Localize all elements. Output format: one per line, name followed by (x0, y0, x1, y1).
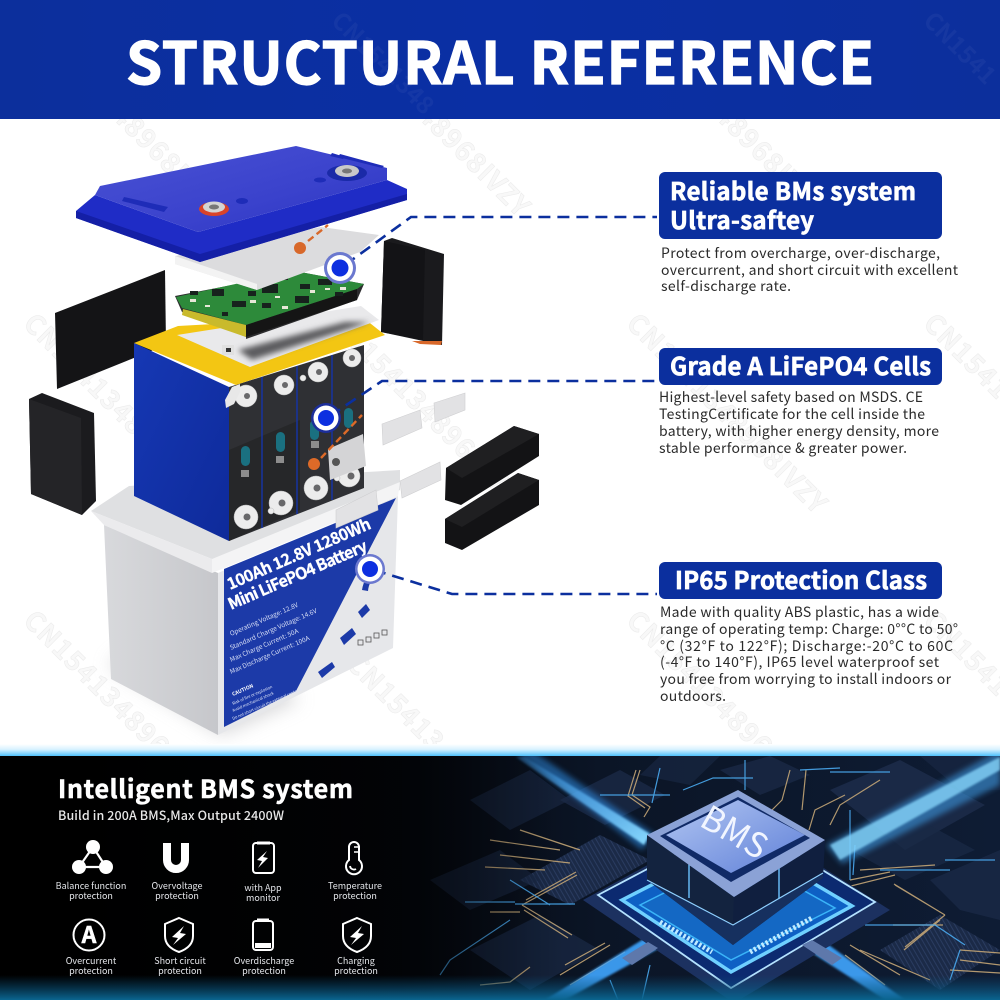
icon: balance nodes (72, 840, 113, 874)
feature: charging (334, 918, 378, 977)
black foam blocks: front right (445, 426, 539, 550)
text: BMS (661, 243, 959, 296)
chip body (647, 835, 825, 945)
chip lid (647, 790, 825, 897)
circuit blocks (430, 756, 1000, 990)
callout: BMS (659, 172, 942, 239)
callout heading: Reliable BMs system (670, 172, 916, 207)
feature: overcurrent: protection (69, 964, 113, 977)
black foam pad: rear left (55, 270, 166, 389)
chip label: BMS (693, 791, 778, 869)
gold circuit traces (480, 770, 1000, 985)
feature: overcurrent (66, 916, 117, 977)
floor shadow (108, 610, 300, 735)
case label: Standard Charge Voltage: 14.6V (228, 605, 318, 652)
watermarks: CN1541348968IVZY (322, 6, 541, 225)
cell blue side (134, 343, 229, 541)
feature: short circuit: Short circuit (154, 954, 206, 967)
feature: overdischarge: protection (242, 964, 286, 977)
terminal clip (225, 384, 240, 408)
watermarks: CN1541348968IVZY (16, 6, 235, 225)
watermarks: CN1541348968IVZY (16, 303, 235, 522)
case label: Mini LiFePO4 Battery (223, 533, 371, 615)
callout heading (670, 172, 916, 236)
title: STRUCTURAL REFERENCE (126, 17, 874, 101)
metal connector strips (336, 393, 465, 528)
feature: temperature (328, 842, 382, 902)
feature: balance (56, 840, 126, 902)
callout heading: IP65 Protection Class (675, 561, 927, 596)
chip base plate (583, 853, 890, 996)
text: case: °C (32°F to 122°F); Discharge:-20°C to 60C (660, 636, 953, 656)
feature: short circuit: protection (158, 964, 202, 977)
icon: battery bolt (253, 843, 274, 873)
leader line: cells (330, 381, 657, 416)
case left face (104, 525, 218, 735)
text: case: outdoors. (660, 686, 726, 706)
BMS panel background (0, 750, 1000, 1000)
BMS chip (583, 790, 890, 1000)
text: case: Made with quality ABS plastic, has a wide (660, 602, 939, 622)
battery case (91, 470, 400, 735)
icon: U (167, 843, 185, 869)
watermarks: CN1541348968IVZY (322, 303, 541, 522)
exploded battery illustration (29, 146, 539, 735)
case right face (218, 496, 398, 735)
text: BMS: overcurrent, and short circuit with excellent (661, 260, 959, 280)
feature: charging: protection (334, 964, 378, 977)
icon: thermometer (346, 842, 362, 874)
blue lid (76, 146, 407, 262)
feature: charging: Charging (337, 954, 375, 967)
chip base arms (622, 942, 658, 965)
top insulator sheet (177, 306, 379, 367)
text: BMS: Protect from overcharge, over-discharge, (661, 243, 940, 263)
icon: A circle: A (81, 916, 97, 950)
leader line: case (374, 570, 657, 594)
callout: case (659, 561, 942, 599)
feature: temperature: Temperature (328, 879, 382, 892)
feature: app monitor: with App (244, 881, 282, 894)
feature: balance: protection (69, 889, 113, 902)
circuit board (175, 272, 364, 339)
text: cells: Highest-level safety based on MSDS. CE (659, 387, 923, 407)
compliance symbols (358, 630, 387, 645)
text: BMS: self-discharge rate. (661, 276, 791, 296)
yellow insulation (134, 316, 385, 385)
feature: app monitor: monitor (246, 891, 280, 904)
watermarks: CN1541348968IVZY (619, 6, 838, 225)
feature: overcurrent: Overcurrent (66, 954, 117, 967)
cell dark front (229, 345, 364, 541)
BMS heading: Intelligent BMS system (58, 770, 353, 806)
positive terminal (199, 202, 229, 216)
chip contacts (660, 918, 812, 952)
text: cells (659, 387, 939, 458)
marker: BMS (324, 252, 356, 284)
title banner: CN1541348 (325, 2, 444, 121)
case label: Max Charge Current: 50A (228, 625, 300, 664)
cell vents (241, 408, 353, 477)
negative terminal (327, 165, 367, 181)
battery cell stack (134, 306, 385, 541)
case label: Max Discharge Current: 100A (228, 632, 311, 676)
leader line: BMS (345, 217, 657, 265)
blue circuit traces (440, 760, 995, 1000)
glow strip (0, 744, 1000, 756)
lid deck (95, 146, 387, 232)
feature: short circuit (154, 918, 206, 977)
marker: case (355, 554, 385, 584)
watermarks: CN1541348968IVZY (619, 600, 838, 819)
feature: overdischarge: Overdischarge (234, 954, 294, 967)
callout heading: Grade A LiFePO4 Cells (670, 347, 931, 382)
feature: temperature: protection (333, 889, 377, 902)
top plate (175, 225, 379, 290)
text: case (660, 602, 958, 706)
feature: overvoltage: protection (155, 889, 199, 902)
label specifications: Operating Voltage: 12.8V (228, 599, 300, 638)
watermarks: CN1541348968IVZY (619, 303, 838, 522)
callout heading: Ultra-saftey (670, 201, 814, 236)
feature: balance: Balance function (56, 879, 126, 892)
case label (222, 498, 396, 727)
black foam block: rear right (381, 238, 444, 345)
text: cells: battery, with higher energy density, more (659, 421, 939, 441)
lid flange (76, 180, 407, 262)
title banner (0, 0, 1000, 121)
cell dividers (262, 355, 332, 528)
BMS subheading: Build in 200A BMS,Max Output 2400W (58, 805, 284, 824)
black foam block: front left (29, 393, 96, 515)
case label: Risk of fire or explosion (231, 684, 274, 707)
watermarks: CN1541348968IVZY (16, 600, 235, 819)
feature: overvoltage: Overvoltage (152, 879, 202, 892)
text: case: you free from worrying to install indoors or (660, 669, 952, 689)
busbar (328, 434, 366, 480)
light rays (516, 750, 1000, 1000)
case label: Avoid mechanical shock (231, 690, 276, 714)
feature: overdischarge (234, 920, 294, 977)
case label: Do not short circuit the external contacts (231, 686, 303, 722)
icon: shield bolt (343, 918, 371, 952)
watermarks: CN1541348968IVZY (339, 643, 558, 862)
case rim (91, 470, 400, 571)
label heading: 100Ah 12.8V 1280Wh (222, 511, 374, 595)
icon: low battery (253, 920, 273, 950)
text: cells: TestingCertificate for the cell inside the (659, 404, 925, 424)
lid slots (122, 153, 384, 212)
callout: cells (659, 347, 942, 385)
text: case: (-4°F to 140°F), IP65 level waterproof set (660, 652, 940, 672)
cell terminals (234, 349, 361, 529)
text: cells: stable performance & greater power. (659, 438, 907, 458)
text: case: range of operating temp: Charge: 0°°C to 50° (660, 619, 958, 639)
icon: shield bolt (165, 918, 193, 952)
label wave marks (318, 570, 378, 678)
feature: app monitor (244, 843, 282, 904)
label caution: CAUTION (231, 682, 255, 698)
marker: cells (311, 403, 341, 433)
feature: overvoltage (152, 843, 202, 902)
orange dashed marker (308, 415, 362, 470)
